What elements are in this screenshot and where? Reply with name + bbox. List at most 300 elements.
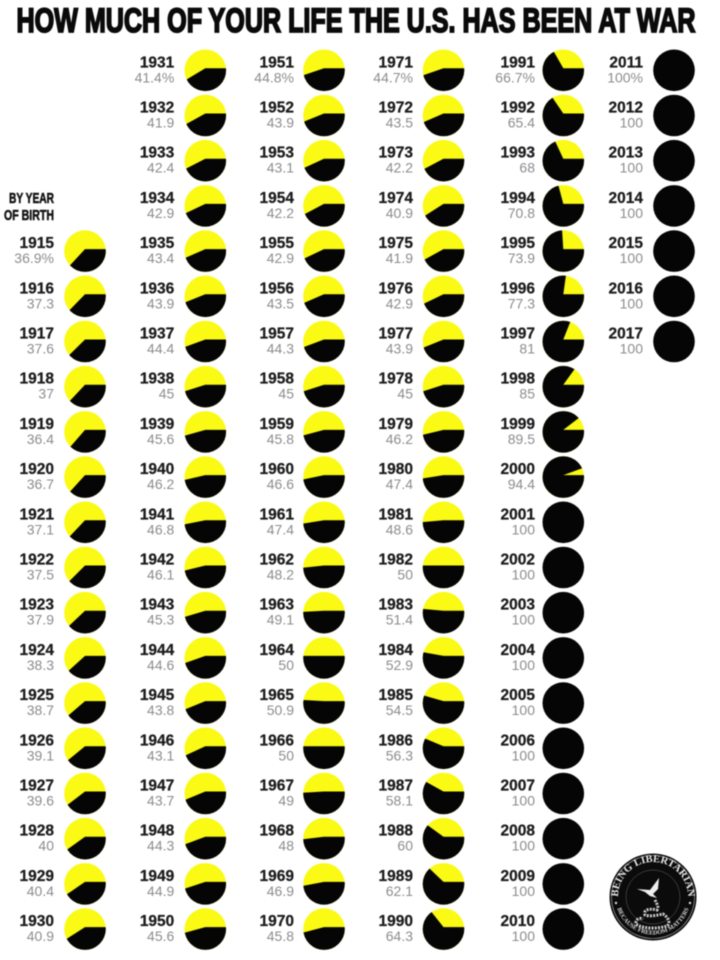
entry 2009 bbox=[501, 863, 584, 905]
entry 2015: 100 bbox=[620, 250, 643, 266]
entry 1987: 58.1 bbox=[386, 792, 413, 808]
entry 1926: 39.1 bbox=[27, 747, 54, 763]
entry 1923: 1923 bbox=[20, 597, 54, 614]
entry 1942: 46.1 bbox=[147, 566, 175, 582]
entry 1945: 43.8 bbox=[147, 702, 175, 718]
entry 1924: 1924 bbox=[20, 642, 54, 659]
entry 1988 bbox=[379, 818, 464, 860]
entry 1994: 70.8 bbox=[508, 205, 535, 221]
entry 1964: 1964 bbox=[260, 642, 294, 659]
entry 1994: 1994 bbox=[501, 190, 535, 207]
entry 1956 bbox=[260, 276, 345, 317]
entry 1996 bbox=[501, 276, 584, 317]
entry 1944: 1944 bbox=[140, 642, 175, 659]
entry 1916: 37.3 bbox=[27, 295, 54, 311]
entry 1964: 50 bbox=[278, 657, 294, 673]
entry 1941: 46.8 bbox=[147, 521, 175, 537]
entry 2008 bbox=[501, 818, 584, 860]
entry 1939: 1939 bbox=[140, 416, 175, 433]
entry 1953 bbox=[260, 140, 345, 182]
subheading: by year of birth bbox=[4, 190, 54, 224]
entry 1951 bbox=[254, 50, 345, 91]
entry 1930 bbox=[20, 908, 106, 950]
entry 1960: 46.6 bbox=[267, 476, 294, 492]
entry 1947: 43.7 bbox=[147, 792, 175, 808]
entry 1969 bbox=[260, 863, 345, 905]
entry 1986 bbox=[379, 728, 464, 769]
entry 1917: 1917 bbox=[20, 326, 54, 342]
entry 1967: 49 bbox=[278, 792, 294, 808]
entry 1938: 45 bbox=[159, 386, 175, 402]
entry 1915: 1915 bbox=[20, 235, 54, 252]
entry 1974: 1974 bbox=[379, 190, 413, 207]
entry 1937 bbox=[140, 321, 226, 362]
entry 1981 bbox=[379, 502, 464, 543]
entry 2006: 2006 bbox=[501, 732, 535, 749]
entry 1995: 73.9 bbox=[508, 250, 535, 266]
entry 1965: 50.9 bbox=[267, 702, 294, 718]
entry 2004 bbox=[501, 637, 584, 679]
entry 1946: 43.1 bbox=[147, 747, 175, 763]
entry 1978 bbox=[379, 366, 464, 408]
entry 1924: 38.3 bbox=[27, 657, 54, 673]
entry 1926: 1926 bbox=[20, 732, 54, 749]
entry 1950: 1950 bbox=[140, 913, 174, 930]
entry 1989 bbox=[379, 863, 464, 905]
entry 2005: 100 bbox=[512, 702, 535, 718]
logo: being libertarian seal bbox=[608, 852, 698, 942]
entry 2003 bbox=[501, 592, 584, 634]
entry 1927: 1927 bbox=[20, 778, 54, 794]
entry 2013: 100 bbox=[620, 160, 643, 176]
column: 1931-1950 bbox=[135, 50, 226, 950]
entry 2010: 2010 bbox=[501, 913, 535, 930]
entry 1941 bbox=[140, 502, 226, 543]
column: 1991-2010 bbox=[495, 50, 584, 950]
entry 1927 bbox=[20, 773, 106, 814]
entry 1923 bbox=[20, 592, 106, 634]
entry 1950: 45.6 bbox=[147, 928, 175, 944]
entry 1979 bbox=[379, 411, 464, 453]
entry 1935 bbox=[140, 230, 226, 272]
entry 2016 bbox=[609, 276, 695, 317]
entry 1922 bbox=[20, 547, 106, 588]
entry 1954 bbox=[260, 185, 345, 227]
entry 2008: 2008 bbox=[501, 823, 535, 840]
entry 1983: 1983 bbox=[379, 597, 413, 614]
entry 2000 bbox=[501, 456, 584, 498]
entry 1974: 40.9 bbox=[386, 205, 413, 221]
entry 1996: 1996 bbox=[501, 280, 535, 297]
entry 1987 bbox=[379, 773, 464, 814]
entry 1939 bbox=[140, 411, 226, 453]
entry 1954: 1954 bbox=[260, 190, 294, 207]
entry 1949 bbox=[140, 863, 226, 905]
entry 1943 bbox=[140, 592, 226, 634]
entry 1959 bbox=[260, 411, 345, 453]
entry 1939: 45.6 bbox=[147, 431, 175, 447]
entry 1935: 43.4 bbox=[147, 250, 175, 266]
entry 2011 bbox=[607, 50, 695, 91]
entry 2004: 100 bbox=[512, 657, 535, 673]
entry 1969: 1969 bbox=[260, 868, 294, 885]
entry 1948: 1948 bbox=[140, 823, 175, 840]
column: 1915-1930 bbox=[14, 230, 106, 950]
entry 2010 bbox=[501, 908, 584, 950]
entry 1960: 1960 bbox=[260, 461, 294, 478]
entry 1979: 1979 bbox=[379, 416, 413, 433]
entry 1961: 1961 bbox=[260, 506, 294, 523]
entry 1982: 50 bbox=[397, 566, 413, 582]
entry 1966 bbox=[260, 728, 345, 769]
entry 1949: 44.9 bbox=[147, 883, 175, 899]
entry 1952: 43.9 bbox=[267, 114, 294, 130]
entry 1951: 44.8% bbox=[254, 69, 294, 85]
entry 1964 bbox=[260, 637, 345, 679]
entry 1946: 1946 bbox=[140, 732, 175, 749]
entry 1999: 89.5 bbox=[508, 431, 535, 447]
entry 1988: 1988 bbox=[379, 823, 413, 840]
entry 1972: 43.5 bbox=[386, 114, 413, 130]
entry 1990: 1990 bbox=[379, 913, 413, 930]
entry 1955 bbox=[260, 230, 345, 272]
entry 1945: 1945 bbox=[140, 687, 175, 704]
entry 2010: 100 bbox=[512, 928, 535, 944]
entry 2005: 2005 bbox=[501, 687, 535, 704]
entry 1967 bbox=[260, 773, 345, 814]
entry 1957: 1957 bbox=[260, 326, 294, 342]
entry 1927: 39.6 bbox=[27, 792, 54, 808]
entry 1995: 1995 bbox=[501, 235, 535, 252]
entry 2011: 100% bbox=[607, 69, 643, 85]
entry 2013 bbox=[609, 140, 695, 182]
entry 1965 bbox=[260, 682, 345, 724]
entry 1971: 44.7% bbox=[373, 69, 413, 85]
entry 1989: 62.1 bbox=[386, 883, 413, 899]
entry 2001: 100 bbox=[512, 521, 535, 537]
entry 1963: 49.1 bbox=[267, 612, 294, 628]
entry 1932 bbox=[140, 95, 226, 136]
entry 1973: 1973 bbox=[379, 145, 413, 162]
entry 1947: 1947 bbox=[140, 778, 174, 794]
entry 1978: 45 bbox=[397, 386, 413, 402]
entry 2012: 100 bbox=[620, 114, 643, 130]
entry 1997: 81 bbox=[519, 340, 535, 356]
entry 1931: 41.4% bbox=[135, 69, 174, 85]
entry 1968: 48 bbox=[278, 838, 294, 854]
entry 1991 bbox=[495, 50, 584, 91]
entry 1959: 1959 bbox=[260, 416, 294, 433]
entry 2016: 2016 bbox=[609, 280, 643, 297]
entry 1919: 1919 bbox=[20, 416, 54, 433]
entry 1941: 1941 bbox=[140, 506, 175, 523]
entry 2015: 2015 bbox=[609, 235, 643, 252]
entry 1929: 40.4 bbox=[27, 883, 54, 899]
entry 1975 bbox=[379, 230, 464, 272]
entry 1984: 52.9 bbox=[386, 657, 413, 673]
entry 1952 bbox=[260, 95, 345, 136]
entry 1982: 1982 bbox=[379, 552, 413, 568]
entry 2007 bbox=[501, 773, 584, 814]
entry 1958: 1958 bbox=[260, 371, 294, 388]
entry 1928: 1928 bbox=[20, 823, 54, 840]
entry 1972 bbox=[379, 95, 464, 136]
entry 1943: 1943 bbox=[140, 597, 175, 614]
entry 1991: 66.7% bbox=[495, 69, 535, 85]
entry 2013: 2013 bbox=[609, 145, 643, 162]
entry 2007: 100 bbox=[512, 792, 535, 808]
entry 1920: 36.7 bbox=[27, 476, 54, 492]
entry 1981: 1981 bbox=[379, 506, 413, 523]
entry 1968: 1968 bbox=[260, 823, 294, 840]
entry 2014 bbox=[609, 185, 695, 227]
entry 1975: 1975 bbox=[379, 235, 413, 252]
entry 2006 bbox=[501, 728, 584, 769]
entry 1916 bbox=[20, 276, 106, 317]
entry 1976 bbox=[379, 276, 464, 317]
entry 1935: 1935 bbox=[140, 235, 175, 252]
entry 2004: 2004 bbox=[501, 642, 535, 659]
entry 1977: 1977 bbox=[379, 326, 413, 342]
entry 1957 bbox=[260, 321, 345, 362]
entry 1940: 1940 bbox=[140, 461, 174, 478]
entry 1917: 37.6 bbox=[27, 340, 54, 356]
entry 2015 bbox=[609, 230, 695, 272]
entry 1925 bbox=[20, 682, 106, 724]
entry 1932: 1932 bbox=[140, 100, 174, 116]
entry 1934: 42.9 bbox=[147, 205, 175, 221]
entry 1998: 1998 bbox=[501, 371, 535, 388]
entry 1992: 65.4 bbox=[508, 114, 535, 130]
entry 1944 bbox=[140, 637, 226, 679]
entry 1999 bbox=[501, 411, 584, 453]
entry 1923: 37.9 bbox=[27, 612, 54, 628]
entry 1969: 46.9 bbox=[267, 883, 294, 899]
entry 1929: 1929 bbox=[20, 868, 54, 885]
entry 2017: 100 bbox=[620, 340, 643, 356]
entry 1930: 40.9 bbox=[27, 928, 54, 944]
entry 1948 bbox=[140, 818, 226, 860]
column: 2011-2017 bbox=[607, 50, 695, 362]
entry 1921 bbox=[20, 502, 106, 543]
entry 1959: 45.8 bbox=[267, 431, 294, 447]
entry 1954: 42.2 bbox=[267, 205, 294, 221]
entry 1970: 1970 bbox=[260, 913, 294, 930]
entry 2001: 2001 bbox=[501, 506, 535, 523]
entry 1984 bbox=[379, 637, 464, 679]
entry 2007: 2007 bbox=[501, 778, 535, 794]
entry 1955: 42.9 bbox=[267, 250, 294, 266]
entry 1956: 1956 bbox=[260, 280, 294, 297]
entry 1915 bbox=[14, 230, 106, 272]
entry 2016: 100 bbox=[620, 295, 643, 311]
entry 1996: 77.3 bbox=[508, 295, 535, 311]
entry 1947 bbox=[140, 773, 226, 814]
entry 1999: 1999 bbox=[501, 416, 535, 433]
entry 1921: 37.1 bbox=[27, 521, 54, 537]
entry 1945 bbox=[140, 682, 226, 724]
entry 1957: 44.3 bbox=[267, 340, 294, 356]
entry 1997 bbox=[501, 321, 584, 362]
entry 1985 bbox=[379, 682, 464, 724]
entry 1992 bbox=[501, 95, 584, 136]
entry 1919: 36.4 bbox=[27, 431, 54, 447]
entry 1958 bbox=[260, 366, 345, 408]
entry 1937: 1937 bbox=[140, 326, 174, 342]
entry 1970 bbox=[260, 908, 345, 950]
entry 2014: 2014 bbox=[609, 190, 643, 207]
entry 1917 bbox=[20, 321, 106, 362]
entry 1928 bbox=[20, 818, 106, 860]
entry 1921: 1921 bbox=[20, 506, 54, 523]
column: 1951-1970 bbox=[254, 50, 345, 950]
entry 1963: 1963 bbox=[260, 597, 294, 614]
entry 1966: 1966 bbox=[260, 732, 294, 749]
entry 1980: 47.4 bbox=[386, 476, 413, 492]
entry 1976: 42.9 bbox=[386, 295, 413, 311]
entry 1983: 51.4 bbox=[386, 612, 413, 628]
entry 1937: 44.4 bbox=[147, 340, 175, 356]
entry 1926 bbox=[20, 728, 106, 769]
entry 1968 bbox=[260, 818, 345, 860]
entry 1960 bbox=[260, 456, 345, 498]
entry 1956: 43.5 bbox=[267, 295, 294, 311]
entry 1977 bbox=[379, 321, 464, 362]
entry 1978: 1978 bbox=[379, 371, 413, 388]
entry 1944: 44.6 bbox=[147, 657, 175, 673]
entry 1918: 1918 bbox=[20, 371, 54, 388]
entry 2002 bbox=[501, 547, 584, 588]
entry 1924 bbox=[20, 637, 106, 679]
entry 2000: 94.4 bbox=[508, 476, 535, 492]
entry 1981: 48.6 bbox=[386, 521, 413, 537]
entry 1925: 1925 bbox=[20, 687, 54, 704]
entry 1975: 41.9 bbox=[386, 250, 413, 266]
entry 1922: 37.5 bbox=[27, 566, 54, 582]
entry 1992: 1992 bbox=[501, 100, 535, 116]
entry 1934 bbox=[140, 185, 226, 227]
entry 1990 bbox=[379, 908, 464, 950]
entry 2009: 2009 bbox=[501, 868, 535, 885]
entry 1985: 54.5 bbox=[386, 702, 413, 718]
column: 1971-1990 bbox=[373, 50, 464, 950]
entry 1962: 48.2 bbox=[267, 566, 294, 582]
entry 1976: 1976 bbox=[379, 280, 413, 297]
entry 1963 bbox=[260, 592, 345, 634]
entry 1979: 46.2 bbox=[386, 431, 413, 447]
entry 1931 bbox=[135, 50, 226, 91]
entry 1952: 1952 bbox=[260, 100, 294, 116]
entry 1993 bbox=[501, 140, 584, 182]
entry 1984: 1984 bbox=[379, 642, 413, 659]
entry 1987: 1987 bbox=[379, 778, 413, 794]
entry 1950 bbox=[140, 908, 226, 950]
entry 2006: 100 bbox=[512, 747, 535, 763]
entry 1988: 60 bbox=[397, 838, 413, 854]
entry 1951: 1951 bbox=[260, 54, 294, 71]
entry 1962 bbox=[260, 547, 345, 588]
entry 1946 bbox=[140, 728, 226, 769]
entry 2008: 100 bbox=[512, 838, 535, 854]
entry 2012 bbox=[609, 95, 695, 136]
entry 1948: 44.3 bbox=[147, 838, 175, 854]
entry 1922: 1922 bbox=[20, 552, 54, 568]
entry 2005 bbox=[501, 682, 584, 724]
entry 2017 bbox=[609, 321, 695, 362]
entry 1916: 1916 bbox=[20, 280, 54, 297]
entry 1933 bbox=[140, 140, 226, 182]
entry 1982 bbox=[379, 547, 464, 588]
entry 1997: 1997 bbox=[501, 326, 535, 342]
entry 1990: 64.3 bbox=[386, 928, 413, 944]
entry 1972: 1972 bbox=[379, 100, 413, 116]
entry 1986: 56.3 bbox=[386, 747, 413, 763]
entry 1970: 45.8 bbox=[267, 928, 294, 944]
entry 1936: 1936 bbox=[140, 280, 175, 297]
entry 1971: 1971 bbox=[379, 54, 413, 71]
logo: being libertarian seal: BEING LIBERTARIAN bbox=[610, 854, 696, 898]
entry 1967: 1967 bbox=[260, 778, 294, 794]
entry 1925: 38.7 bbox=[27, 702, 54, 718]
entry 1931: 1931 bbox=[140, 54, 175, 71]
entry 1974 bbox=[379, 185, 464, 227]
entry 1918: 37 bbox=[38, 386, 54, 402]
entry 1933: 42.4 bbox=[147, 160, 175, 176]
entry 1930: 1930 bbox=[20, 913, 54, 930]
entry 1986: 1986 bbox=[379, 732, 413, 749]
entry 1929 bbox=[20, 863, 106, 905]
entry 1977: 43.9 bbox=[386, 340, 413, 356]
entry 2012: 2012 bbox=[609, 100, 643, 116]
entry 1991: 1991 bbox=[501, 54, 535, 71]
entry 1980: 1980 bbox=[379, 461, 413, 478]
entry 1998: 85 bbox=[519, 386, 535, 402]
entry 1938 bbox=[140, 366, 226, 408]
entry 1936: 43.9 bbox=[147, 295, 175, 311]
entry 2011: 2011 bbox=[609, 54, 643, 71]
entry 1940: 46.2 bbox=[147, 476, 175, 492]
entry 2000: 2000 bbox=[501, 461, 535, 478]
entry 1936 bbox=[140, 276, 226, 317]
entry 1943: 45.3 bbox=[147, 612, 175, 628]
entry 2001 bbox=[501, 502, 584, 543]
entry 1918 bbox=[20, 366, 106, 408]
entry 1989: 1989 bbox=[379, 868, 413, 885]
entry 1933: 1933 bbox=[140, 145, 175, 162]
entry 1958: 45 bbox=[278, 386, 294, 402]
entry 1966: 50 bbox=[278, 747, 294, 763]
entry 1949: 1949 bbox=[140, 868, 175, 885]
subheading: by year of birth: OF BIRTH bbox=[4, 207, 54, 224]
entry 1953: 43.1 bbox=[267, 160, 294, 176]
entry 1934: 1934 bbox=[140, 190, 175, 207]
entry 1953: 1953 bbox=[260, 145, 294, 162]
entry 1932: 41.9 bbox=[147, 114, 175, 130]
entry 1980 bbox=[379, 456, 464, 498]
entry 2003: 2003 bbox=[501, 597, 535, 614]
entry 1955: 1955 bbox=[260, 235, 294, 252]
entry 1985: 1985 bbox=[379, 687, 413, 704]
entry 1920: 1920 bbox=[20, 461, 54, 478]
subheading: by year of birth: BY YEAR bbox=[9, 190, 54, 207]
entry 1973: 42.2 bbox=[386, 160, 413, 176]
logo: being libertarian seal: BECAUSE FREEDOM MATTERS bbox=[616, 906, 689, 936]
entry 1971 bbox=[373, 50, 464, 91]
entry 1920 bbox=[20, 456, 106, 498]
entry 1993: 68 bbox=[519, 160, 535, 176]
entry 1942 bbox=[140, 547, 226, 588]
entry 2002: 100 bbox=[512, 566, 535, 582]
